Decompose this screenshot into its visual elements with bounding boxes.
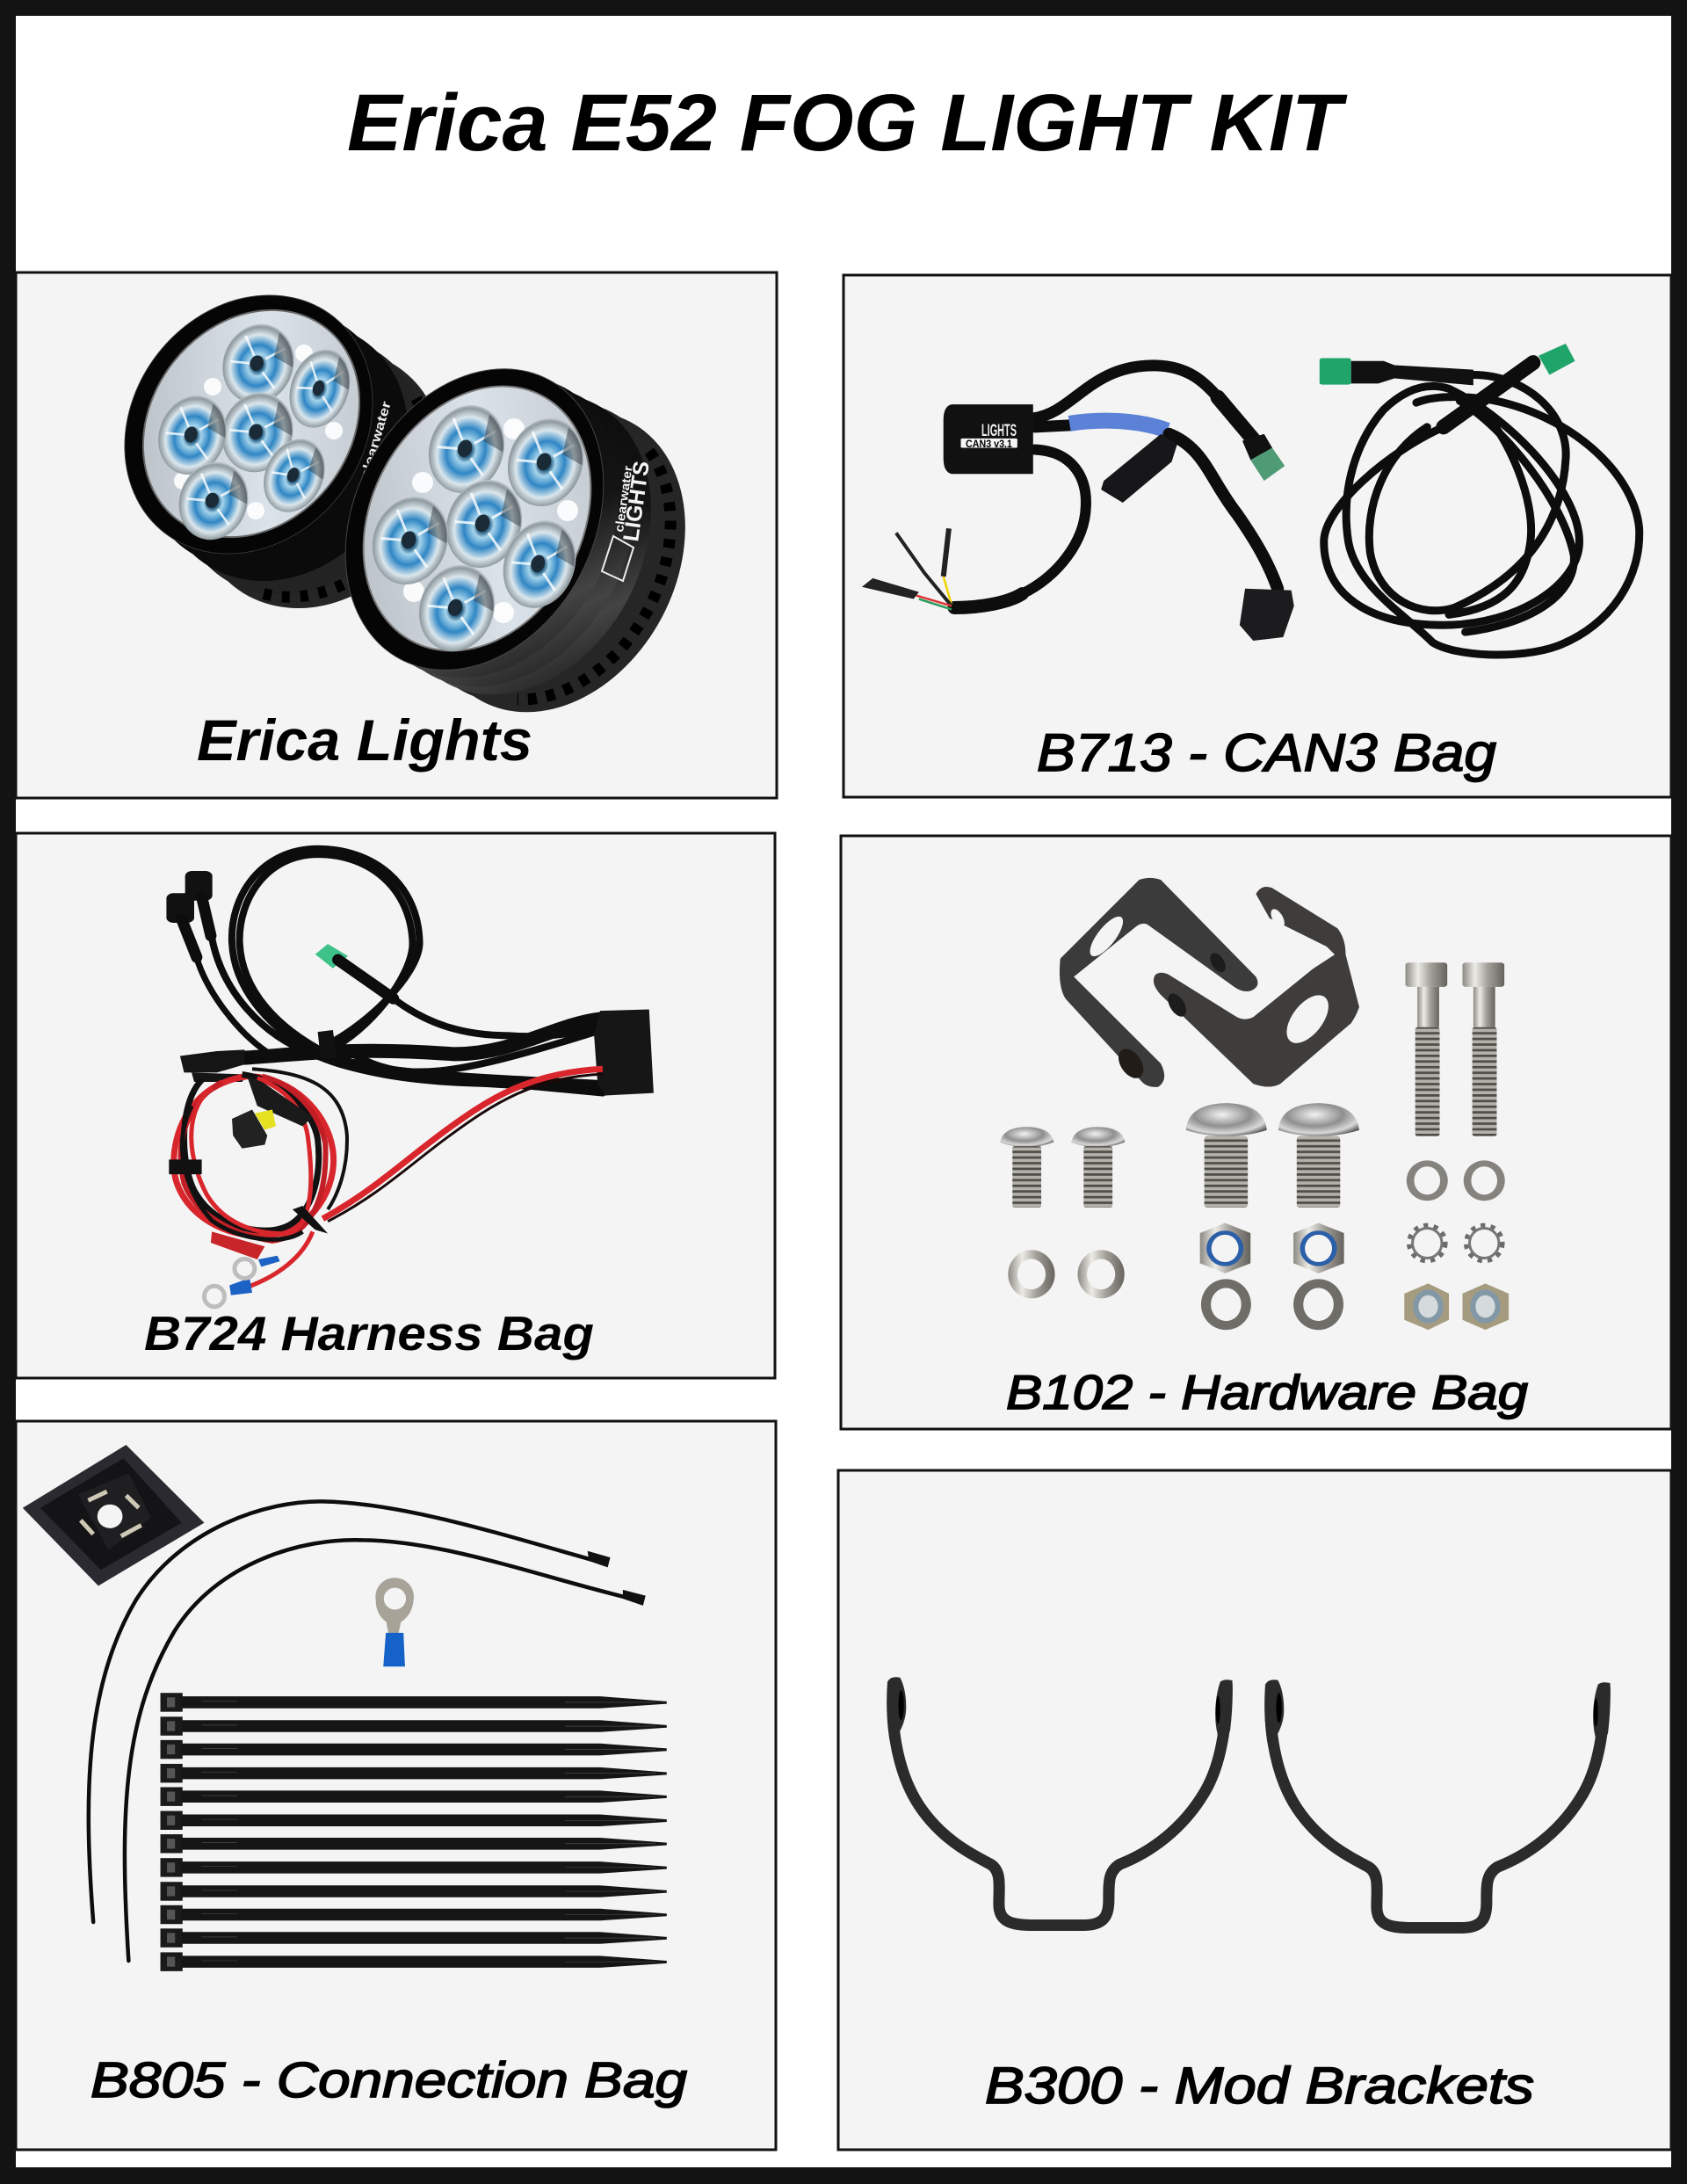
icon: right mod bracket (1264, 1680, 1611, 1927)
icon: front fog light (294, 323, 736, 758)
label: B724: B724 Harness Bag (144, 1306, 594, 1360)
icon: blue lock nuts (1200, 1223, 1344, 1273)
icon: left mod bracket (887, 1677, 1233, 1925)
icon: back fog light (74, 245, 494, 658)
title: Erica E52 FOG LIGHT KIT (347, 78, 1348, 168)
icon: back fog light: clearwater (358, 400, 395, 480)
panel background (16, 1421, 776, 2150)
panel: Erica Lights (16, 245, 777, 798)
panel: B724 Harness Bag (16, 833, 775, 1378)
icon: front fog light: LIGHTS (619, 460, 655, 543)
icon: blue ring terminal (375, 1578, 414, 1666)
label: B300: B300 - Mod Brackets (985, 2057, 1534, 2115)
icon: right L bracket (1154, 887, 1359, 1087)
icon: left L bracket (1060, 878, 1257, 1087)
icon: adhesive tie mount (23, 1445, 204, 1585)
panel: B805 Connection Bag (16, 1421, 776, 2150)
module version label: CAN3 v3.1 (966, 438, 1012, 450)
panel: B300 Mod Brackets (838, 1470, 1671, 2150)
label: B713: B713 - CAN3 Bag (1037, 723, 1496, 782)
icon: long cap screws (1406, 962, 1504, 1136)
module logo text: LIGHTS (981, 422, 1017, 440)
icon: large washers (1201, 1279, 1343, 1330)
panel background (16, 272, 777, 798)
icon: large button-head bolts (1186, 1103, 1359, 1208)
icon: twelve straight zip ties (161, 1693, 667, 1971)
panel background (844, 275, 1671, 797)
icon: wiring harness (166, 849, 654, 1307)
label: B805: B805 - Connection Bag (91, 2052, 687, 2108)
icon: brass lock nuts (1404, 1283, 1509, 1330)
icon: washers, right column (1407, 1160, 1505, 1201)
label: B102: B102 - Hardware Bag (1006, 1365, 1528, 1419)
icon: CAN3 module with cables (862, 366, 1294, 641)
icon: washers, small column (1008, 1250, 1125, 1298)
icon: small button-head bolts (1000, 1127, 1125, 1208)
panel: B713 CAN3 Bag (844, 275, 1671, 797)
panel background (16, 833, 775, 1378)
panel background (838, 1470, 1671, 2150)
icon: cable coil with green connectors (1320, 344, 1640, 655)
icon: star lock washers (1409, 1226, 1502, 1260)
icon: front fog light: clearwater (612, 464, 635, 533)
icon: long curved cable ties (89, 1501, 646, 1961)
panel: B102 Hardware Bag (841, 836, 1671, 1429)
label: Erica Lights: Erica Lights (197, 707, 532, 773)
panel background (841, 836, 1671, 1429)
